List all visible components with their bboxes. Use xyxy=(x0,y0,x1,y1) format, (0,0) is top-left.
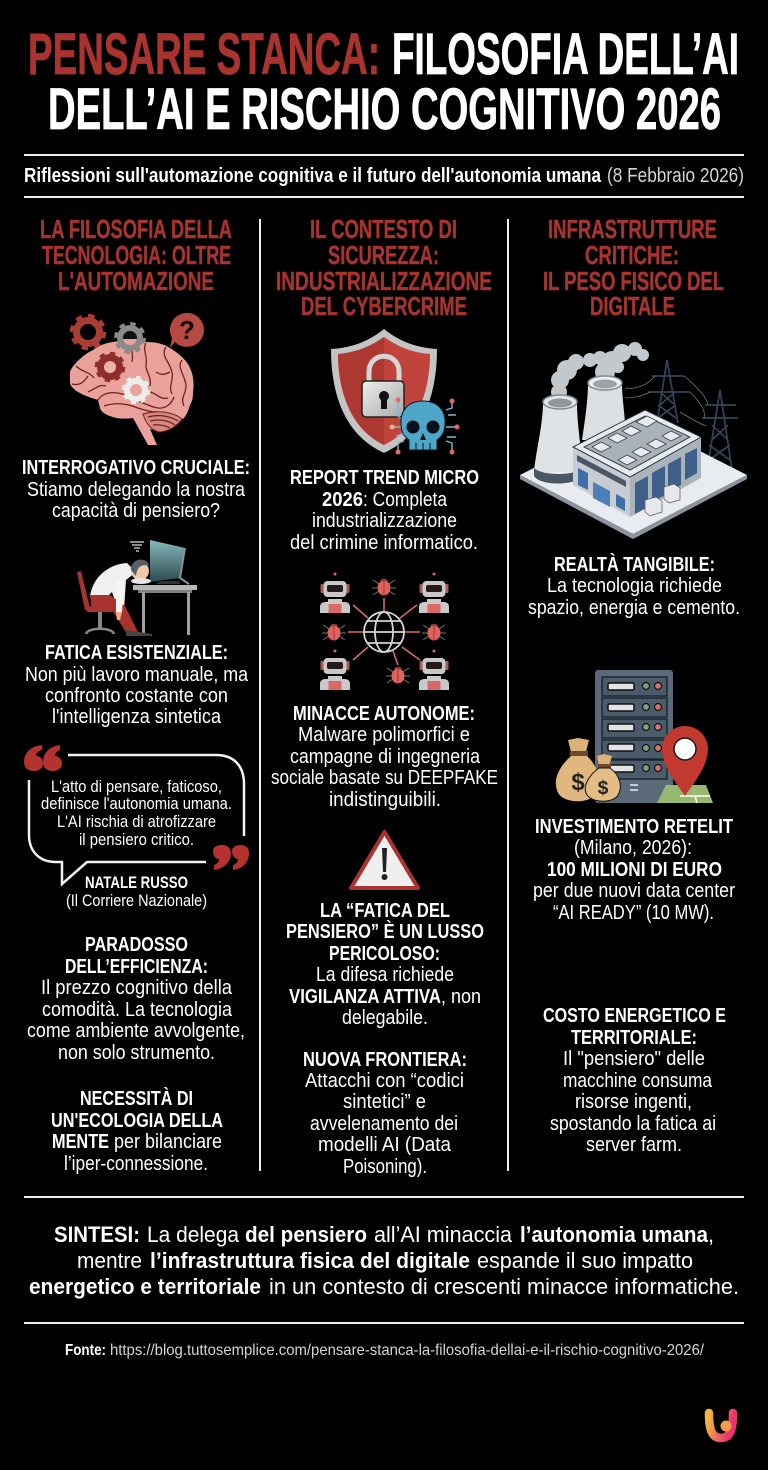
text: minacce autonome: MINACCE AUTONOME: xyxy=(293,703,475,725)
text: paradosso dell'efficienza: Il prezzo cognitivo della xyxy=(41,977,233,999)
text: source: https://blog.tuttosemplice.com/pensare-stanca-la-filosofia-dellai-e-il-rischio-cognitivo-2026/ xyxy=(110,1342,705,1359)
icon: smoke xyxy=(551,342,649,400)
icon: question bubble: ? xyxy=(179,315,195,345)
text: ecologia della mente: NECESSITÀ DI xyxy=(80,1087,193,1110)
text: paradosso dell'efficienza: non solo strumento. xyxy=(58,1042,215,1064)
text: costo energetico: Il "pensiero" delle xyxy=(563,1048,705,1070)
heading: column 1 xyxy=(40,214,232,296)
text: report trend micro: del crimine informatico. xyxy=(290,532,478,554)
text: realta tangibile xyxy=(528,553,740,619)
text: fatica esistenziale: FATICA ESISTENZIALE: xyxy=(45,642,228,664)
text: nuova frontiera: NUOVA FRONTIERA: xyxy=(303,1049,467,1071)
heading: column 2: IL CONTESTO DI xyxy=(310,214,457,244)
text: investimento retelit xyxy=(533,816,735,924)
text: paradosso dell'efficienza: comodità. La tecnologia xyxy=(42,999,233,1021)
text: ecologia della mente: MENTE xyxy=(52,1131,109,1153)
icon: white gear xyxy=(123,377,149,403)
icon: data center with cooling towers xyxy=(520,342,747,539)
text: ecologia della mente xyxy=(51,1087,223,1175)
icon: location pin xyxy=(662,726,708,796)
text: quote attribution xyxy=(66,873,207,910)
panel: infrastrutture critiche xyxy=(520,214,747,1156)
text: costo energetico: COSTO ENERGETICO E xyxy=(543,1005,726,1027)
text: report trend micro: industrializzazione xyxy=(312,510,457,532)
text: paradosso dell'efficienza: come ambiente avvolgente, xyxy=(27,1020,245,1042)
icon: grey gear xyxy=(116,324,144,352)
icon: map xyxy=(657,785,713,803)
text: ecologia della mente: l’iper-connessione. xyxy=(64,1153,208,1175)
text: fatica del pensiero: PENSIERO” È UN LUSSO xyxy=(286,920,484,943)
heading: column 3: CRITICHE: xyxy=(585,240,679,270)
heading: column 1: LA FILOSOFIA DELLA xyxy=(40,214,232,244)
heading: column 2: INDUSTRIALIZZAZIONE xyxy=(276,266,492,296)
panel: la filosofia della tecnologia xyxy=(22,214,250,1175)
text: sintesi: espande il suo impatto xyxy=(477,1248,693,1273)
text: fatica del pensiero: PERICOLOSO: xyxy=(329,943,440,965)
text: costo energetico: risorse ingenti, xyxy=(575,1091,692,1113)
icon: dark red gear xyxy=(72,316,104,348)
icon: bot and bug network xyxy=(320,572,449,690)
callout: quote bubble: definisce l'autonomia umana. xyxy=(41,794,232,813)
icon: power pylons xyxy=(625,360,738,477)
icon: inner gear xyxy=(96,353,124,381)
text: fatica del pensiero: , non xyxy=(441,986,481,1008)
subtitle: (8 Febbraio 2026) xyxy=(607,165,744,187)
text: sintesi xyxy=(29,1222,739,1299)
text: sintesi: in un contesto di crescenti minacce informatiche. xyxy=(269,1274,739,1299)
icon: bugs xyxy=(322,579,446,684)
text: investimento retelit: “AI READY” (10 MW). xyxy=(553,902,714,924)
heading: column 1: TECNOLOGIA: OLTRE xyxy=(42,240,231,270)
text: fatica del pensiero: La difesa richiede xyxy=(316,964,454,986)
text: fatica esistenziale: confronto costante con xyxy=(45,685,228,707)
text: sintesi: mentre xyxy=(77,1248,142,1273)
icon: warning triangle xyxy=(351,832,418,888)
text: minacce autonome: campagne di ingegneria xyxy=(290,746,481,768)
icon: exhausted worker at desk xyxy=(77,540,197,636)
callout: quote bubble xyxy=(24,745,249,884)
text: costo energetico: TERRITORIALE: xyxy=(571,1027,697,1049)
text: minacce autonome xyxy=(271,703,498,811)
text: interrogativo cruciale: capacità di pensiero? xyxy=(52,500,220,522)
icon: robots xyxy=(320,572,449,690)
subtitle: Riflessioni sull'automazione cognitiva e il futuro dell'autonomia umana xyxy=(24,165,602,187)
text: costo energetico: server farm. xyxy=(586,1134,682,1156)
text: nuova frontiera: modelli AI (Data xyxy=(318,1134,452,1156)
text: costo energetico xyxy=(543,1005,726,1156)
text: realta tangibile: REALTÀ TANGIBILE: xyxy=(554,553,715,576)
text: nuova frontiera: Attacchi con “codici xyxy=(305,1070,464,1092)
text: investimento retelit: INVESTIMENTO RETELIT xyxy=(535,816,733,838)
text: nuova frontiera: Poisoning). xyxy=(343,1156,427,1178)
text: sintesi: del pensiero xyxy=(245,1222,367,1247)
text: quote attribution: (Il Corriere Nazionale) xyxy=(66,891,207,910)
title: PENSARE STANCA: xyxy=(28,22,380,87)
text: report trend micro: : Completa xyxy=(363,489,448,511)
text: fatica esistenziale: l'intelligenza sintetica xyxy=(52,706,222,728)
title xyxy=(28,22,739,142)
text: quote attribution: NATALE RUSSO xyxy=(85,873,188,892)
icon: building xyxy=(573,410,701,517)
text: costo energetico: macchine consuma xyxy=(563,1070,713,1092)
text: ecologia della mente: per bilanciare xyxy=(114,1131,222,1153)
icon: server rack, money and location pin: $ xyxy=(571,769,585,796)
text: paradosso dell'efficienza: DELL’EFFICIENZA: xyxy=(65,956,208,978)
icon: shield with lock and skull xyxy=(331,329,460,454)
text: report trend micro xyxy=(290,467,479,554)
text: fatica del pensiero: VIGILANZA ATTIVA xyxy=(289,986,441,1008)
text: investimento retelit: per due nuovi data center xyxy=(533,880,735,902)
text: fatica del pensiero xyxy=(286,900,484,1029)
text: minacce autonome: indistinguibili. xyxy=(329,789,441,811)
text: report trend micro: 2026 xyxy=(322,489,363,511)
text: fatica esistenziale xyxy=(25,642,249,728)
text: nuova frontiera: avvelenamento dei xyxy=(310,1113,458,1135)
text: realta tangibile: La tecnologia richiede xyxy=(547,575,722,597)
text: sintesi: l’autonomia umana xyxy=(520,1222,709,1247)
panel: il contesto di sicurezza xyxy=(271,214,498,1178)
text: source: Fonte: xyxy=(65,1342,106,1359)
text: nuova frontiera: sintetici” e xyxy=(343,1091,426,1113)
text: interrogativo cruciale xyxy=(22,457,250,522)
icon: opening quote xyxy=(24,745,62,771)
heading: column 2: DEL CYBERCRIME xyxy=(301,291,467,321)
callout: quote bubble: L'AI rischia di atrofizzare xyxy=(57,812,216,831)
heading: column 1: L'AUTOMAZIONE xyxy=(58,266,214,296)
text: fatica del pensiero: LA “FATICA DEL xyxy=(320,900,450,922)
callout: quote bubble: L'atto di pensare, faticoso, xyxy=(51,777,222,796)
text: sintesi: energetico e territoriale xyxy=(29,1274,261,1299)
callout: quote bubble: il pensiero critico. xyxy=(79,830,194,849)
text: investimento retelit: 100 MILIONI DI EURO xyxy=(547,859,722,881)
text: interrogativo cruciale: Stiamo delegando la nostra xyxy=(27,479,246,501)
text: realta tangibile: spazio, energia e cemento. xyxy=(528,597,740,619)
heading: column 3: DIGITALE xyxy=(590,291,675,321)
text: sintesi: l’infrastruttura fisica del digitale xyxy=(150,1248,470,1273)
text: sintesi: SINTESI: xyxy=(54,1222,140,1247)
text: paradosso dell'efficienza xyxy=(27,934,245,1064)
text: paradosso dell'efficienza: PARADOSSO xyxy=(85,934,188,956)
text: minacce autonome: sociale basate su DEEPFAKE xyxy=(271,767,498,789)
text: fatica esistenziale: Non più lavoro manuale, ma xyxy=(25,664,249,686)
icon: closing quote xyxy=(213,845,249,870)
text: investimento retelit: (Milano, 2026): xyxy=(574,837,692,859)
text: sintesi: all’AI minaccia xyxy=(374,1222,513,1247)
text: sintesi: , xyxy=(708,1222,714,1247)
text: nuova frontiera xyxy=(303,1049,467,1178)
heading: column 3 xyxy=(543,214,724,321)
icon: server rack, money and location pin xyxy=(556,670,713,803)
heading: column 2 xyxy=(276,214,492,321)
icon: logo xyxy=(709,1413,733,1438)
icon: brain with gears xyxy=(70,313,204,445)
text: sintesi: La delega xyxy=(147,1222,240,1247)
text: report trend micro: REPORT TREND MICRO xyxy=(290,467,479,489)
icon: money bags xyxy=(568,738,589,752)
text: fatica del pensiero: delegabile. xyxy=(342,1007,428,1029)
icon: platform xyxy=(520,417,747,534)
text: ecologia della mente: UN'ECOLOGIA DELLA xyxy=(51,1110,223,1132)
text: minacce autonome: Malware polimorfici e xyxy=(298,724,470,746)
heading: column 2: SICUREZZA: xyxy=(328,240,439,270)
text: costo energetico: spostando la fatica ai xyxy=(550,1113,716,1135)
icon: cooling towers xyxy=(534,376,626,484)
icon: server rack, money and location pin: $ xyxy=(598,778,609,799)
text: interrogativo cruciale: INTERROGATIVO CRUCIALE: xyxy=(22,457,250,479)
